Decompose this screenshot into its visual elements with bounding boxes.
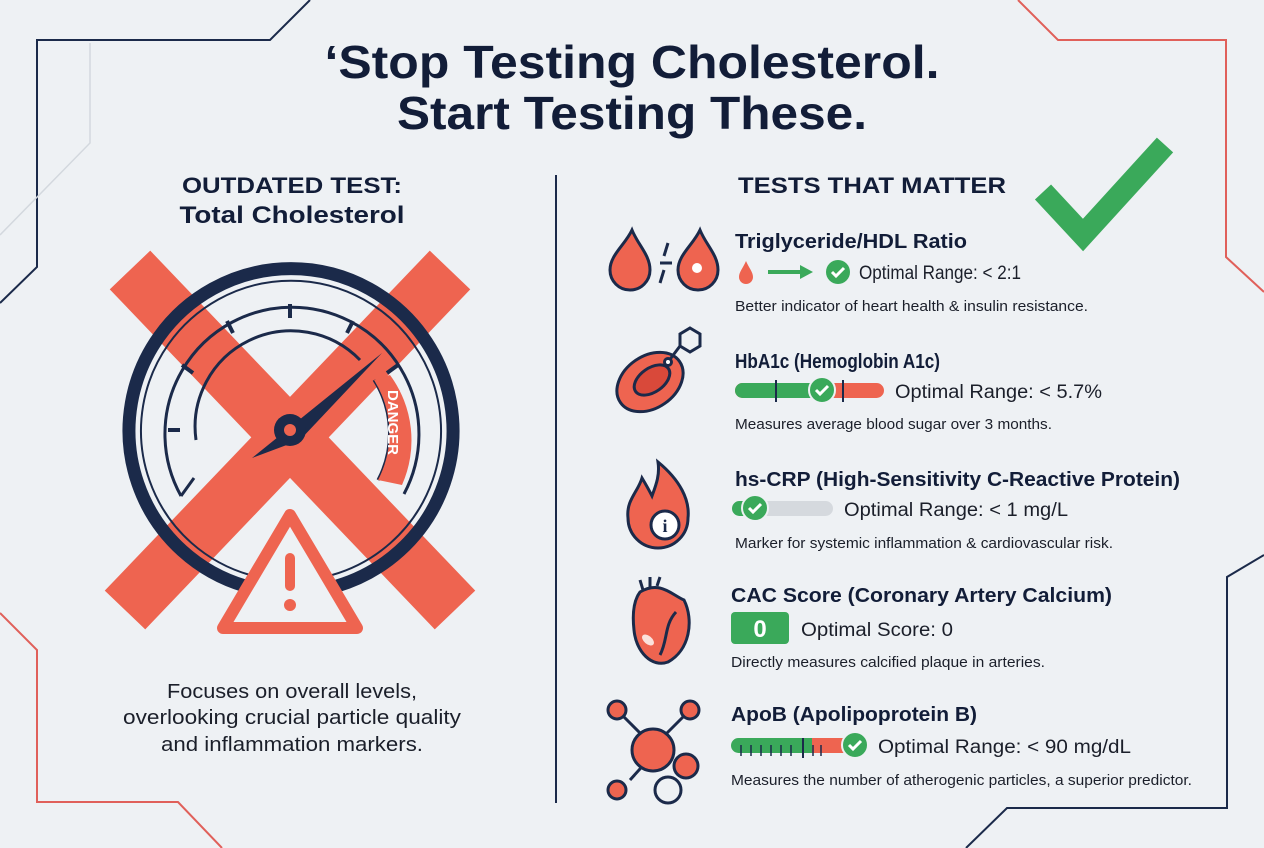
item: CAC score: Directly measures calcified plaque in arteries. [731, 654, 1045, 671]
item: ApoB: ApoB (Apolipoprotein B) [731, 704, 977, 726]
item: ApoB: Optimal Range: < 90 mg/dL [878, 737, 1131, 758]
item: hs-CRP: hs-CRP (High-Sensitivity C-Reactive Protein) [735, 469, 1180, 491]
title: ‘Stop Testing Cholesterol. [324, 36, 940, 88]
icon: drops [610, 230, 718, 290]
item: ApoB: Measures the number of atherogenic particles, a superior predictor. [731, 772, 1192, 789]
title [324, 36, 940, 139]
item: triglyceride/HDL: Better indicator of heart health & insulin resistance. [735, 298, 1088, 315]
icon: molecule [608, 701, 699, 803]
item: triglyceride/HDL: Optimal Range: < 2:1 [859, 263, 1021, 284]
icon: big checkmark [1043, 145, 1165, 235]
item: triglyceride/HDL [610, 230, 1088, 315]
heading: outdated test: OUTDATED TEST: [182, 173, 402, 198]
text: outdated test description [123, 681, 461, 756]
item: CAC score: Optimal Score: 0 [801, 620, 953, 641]
icon: crossed gauge [125, 269, 455, 628]
item: hs-CRP [628, 462, 1180, 552]
text: outdated test description: Focuses on overall levels, [167, 681, 417, 703]
item: CAC score [633, 577, 1112, 671]
icon: crossed gauge: DANGER [384, 390, 401, 455]
heading: tests that matter: TESTS THAT MATTER [738, 173, 1006, 198]
text: outdated test description: overlooking crucial particle quality [123, 707, 461, 729]
item: ApoB [608, 701, 1192, 803]
icon: red blood cell [606, 328, 700, 424]
item: hs-CRP: Marker for systemic inflammation & cardiovascular risk. [735, 535, 1113, 552]
item: HbA1c: Optimal Range: < 5.7% [895, 382, 1102, 403]
item: hs-CRP: i [662, 516, 668, 536]
item: triglyceride/HDL: Triglyceride/HDL Ratio [735, 231, 967, 253]
icon: heart [633, 577, 689, 663]
item: CAC score: CAC Score (Coronary Artery Calcium) [731, 585, 1112, 607]
heading: outdated test [180, 173, 404, 229]
item: HbA1c [606, 328, 1102, 433]
item: CAC score: 0 [753, 616, 767, 643]
text: outdated test description: and inflammation markers. [161, 734, 423, 756]
item: HbA1c: Measures average blood sugar over 3 months. [735, 416, 1052, 433]
item: HbA1c: HbA1c (Hemoglobin A1c) [735, 351, 940, 373]
title: Start Testing These. [397, 87, 867, 139]
item: hs-CRP: Optimal Range: < 1 mg/L [844, 500, 1068, 521]
icon: flame with info [628, 462, 688, 548]
heading: outdated test: Total Cholesterol [180, 202, 404, 229]
